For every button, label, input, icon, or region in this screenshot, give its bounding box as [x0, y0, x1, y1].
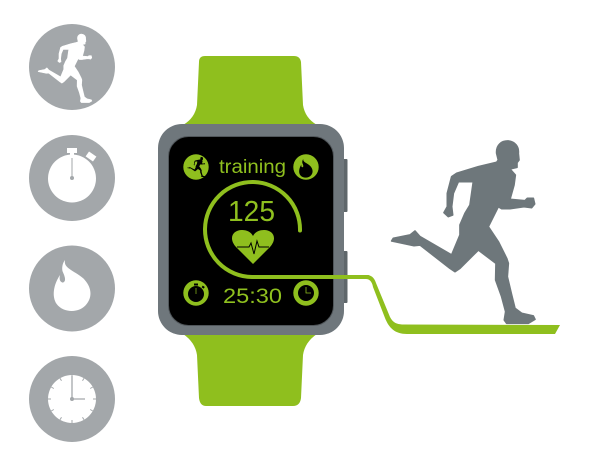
runner silhouette [392, 141, 535, 323]
icon: screen clock [293, 280, 319, 306]
icon: clock badge [29, 356, 115, 442]
heart rate value: 125 [228, 196, 275, 228]
icon: screen runner [183, 154, 209, 180]
icon: flame badge [29, 246, 115, 332]
progress arc and connector line [205, 182, 368, 277]
icon: screen stopwatch [183, 280, 209, 306]
watch side buttons [342, 159, 348, 303]
elapsed time: 25:30 [223, 285, 282, 308]
icon: stopwatch badge [29, 135, 115, 221]
watch screen [168, 136, 334, 326]
watch strap: bottom [183, 334, 317, 406]
icon: heart with pulse [232, 230, 274, 264]
watch case [158, 124, 344, 335]
icon: screen flame [293, 154, 319, 180]
watch strap: top [183, 56, 317, 125]
track ramp [366, 275, 560, 334]
icon: runner badge [29, 24, 115, 110]
heading: training: training [219, 157, 286, 178]
